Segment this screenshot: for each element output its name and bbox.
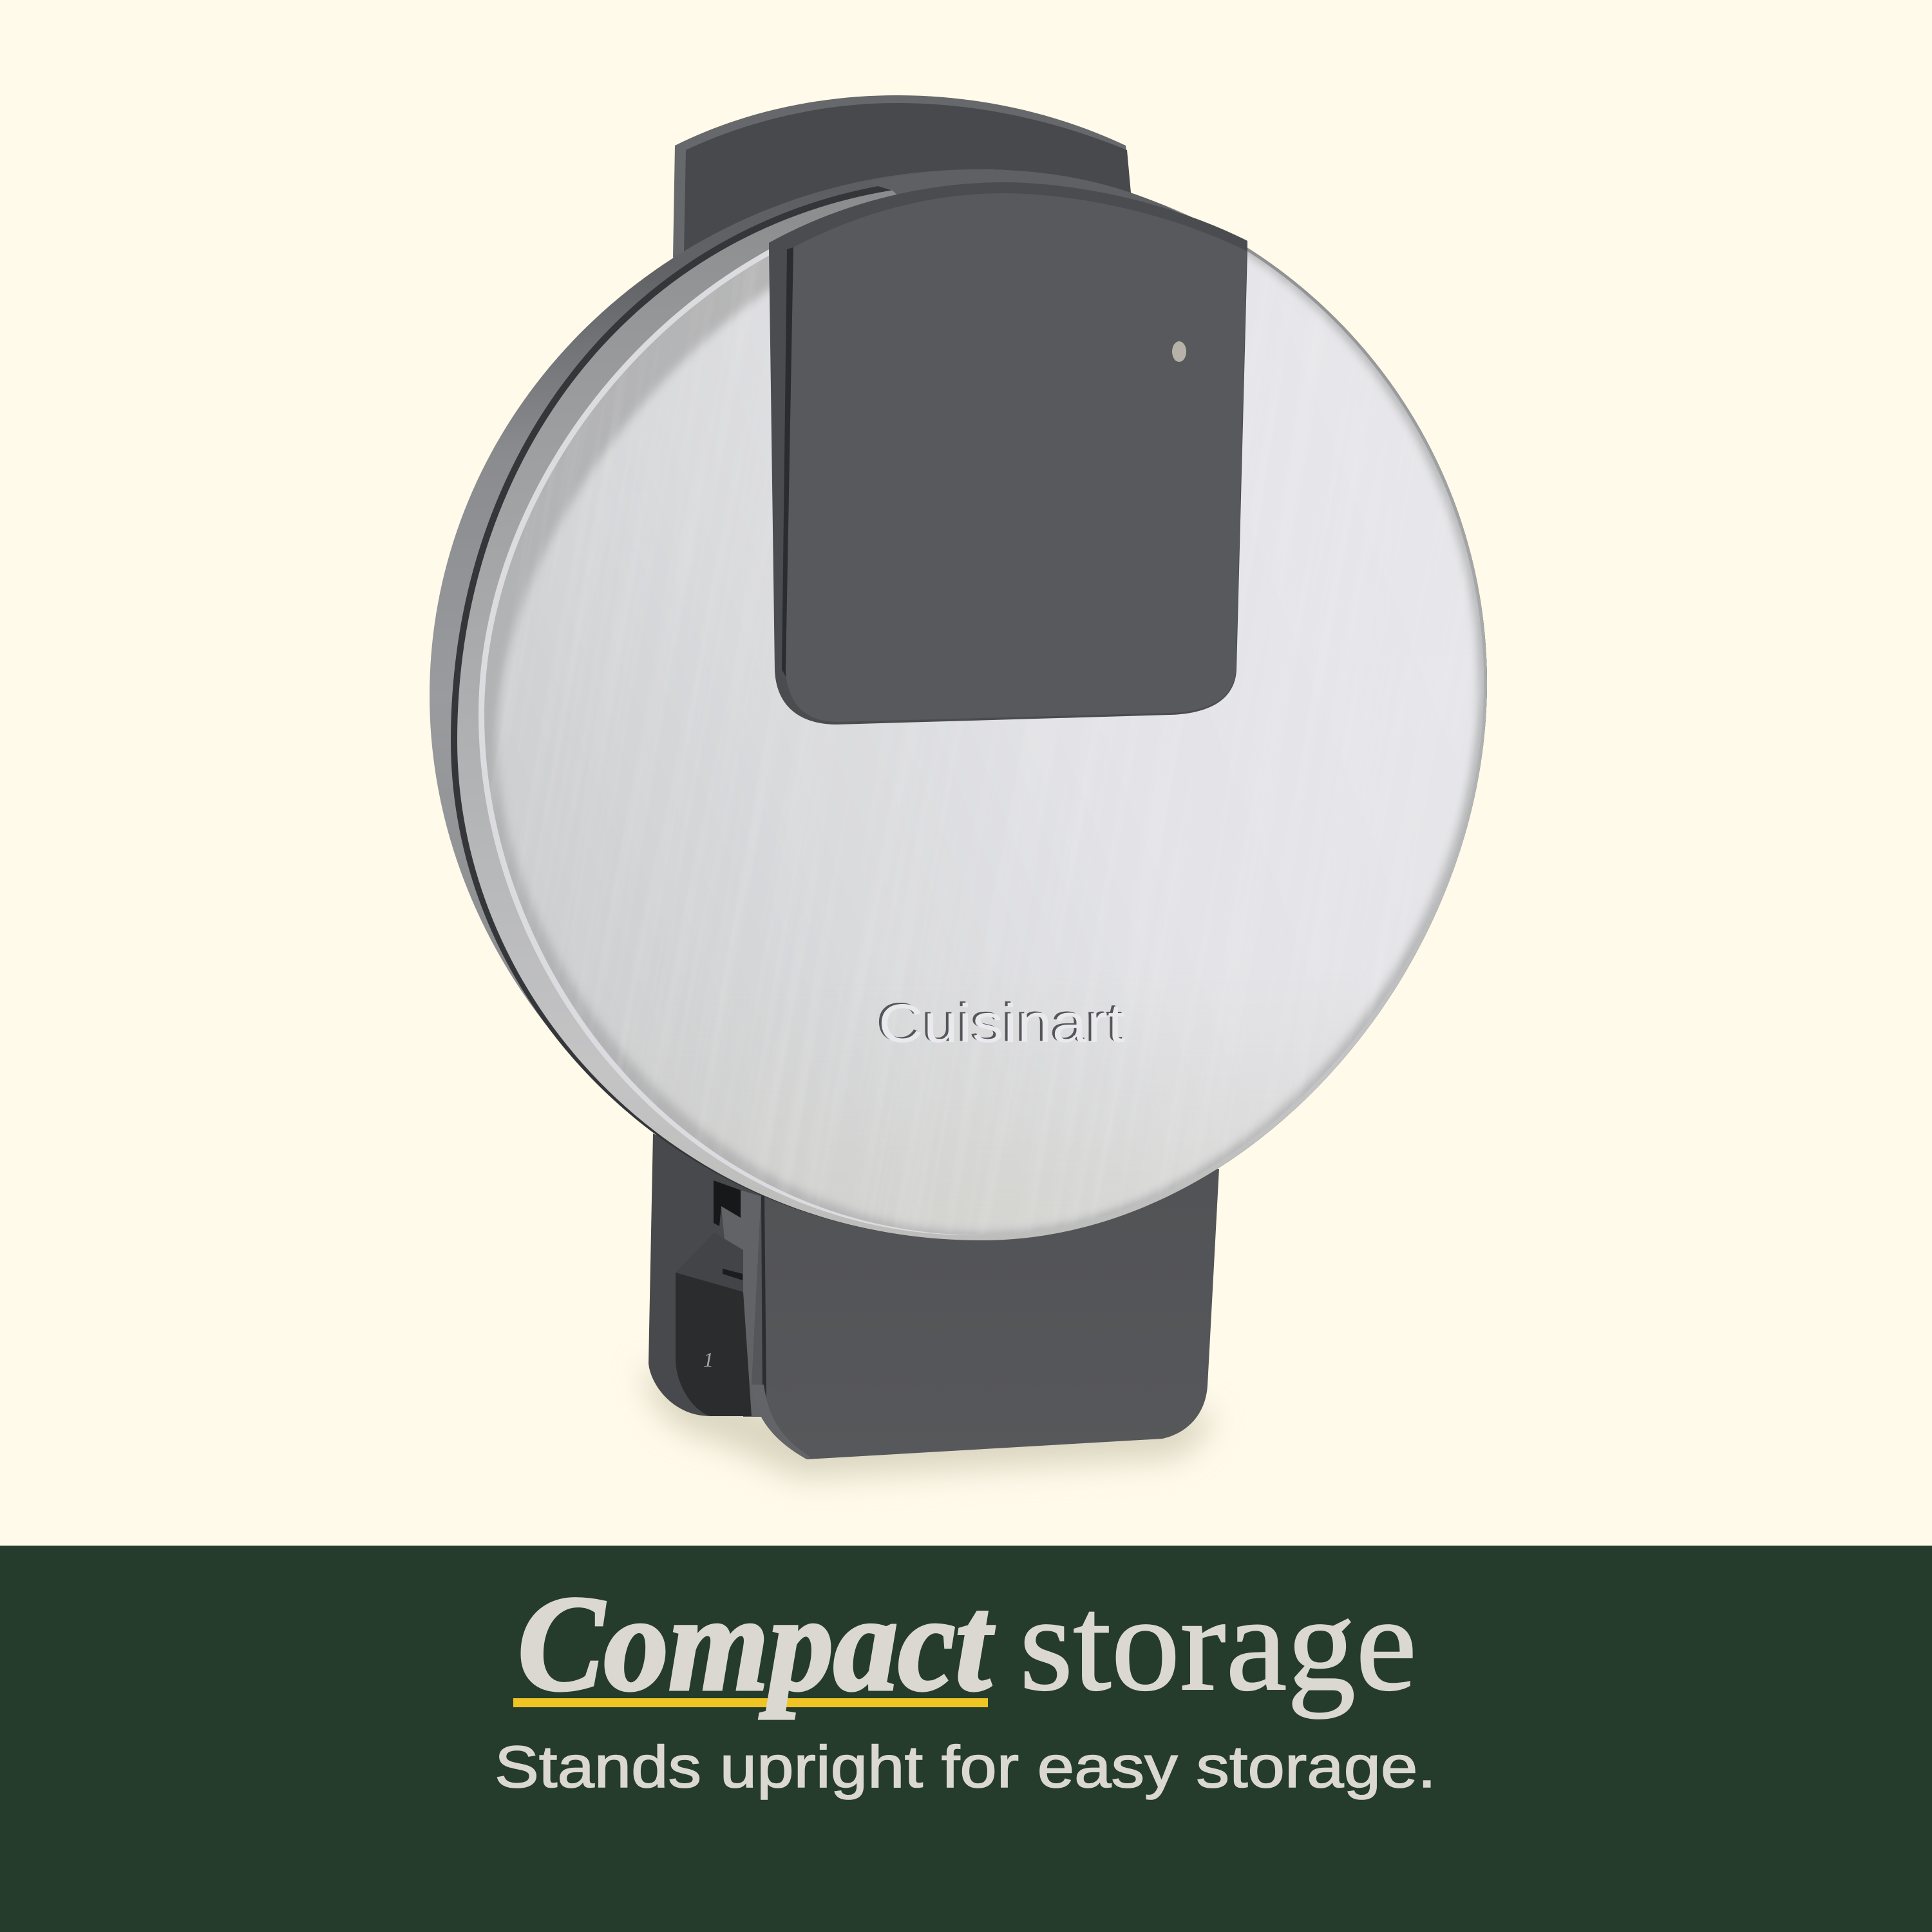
notch — [714, 1180, 741, 1226]
handle inner shadow line — [782, 247, 793, 683]
headline: Compact — [518, 1567, 995, 1719]
embossed logo: Cuisinart — [878, 993, 1125, 1054]
back foot — [649, 1133, 773, 1417]
headline — [518, 1567, 1417, 1719]
recess wedge — [676, 1233, 743, 1292]
caption panel — [0, 1546, 1932, 1932]
metal disc — [430, 169, 1487, 1240]
outer shell — [430, 169, 1487, 1240]
subheading: Stands upright for easy storage. — [495, 1734, 1436, 1800]
headline underline — [513, 1698, 988, 1707]
handle face — [786, 193, 1247, 722]
recess slit — [723, 1269, 743, 1280]
dark cord recess — [676, 1273, 752, 1416]
top latch band — [867, 169, 1247, 258]
foot bottom edge — [752, 1385, 810, 1459]
indicator light — [1172, 341, 1186, 362]
rim highlight — [478, 173, 1484, 1235]
hinge strip — [721, 1190, 766, 1417]
brushed face — [493, 251, 1484, 1235]
rim band — [457, 169, 1487, 1240]
embossed logo: Cuisinart — [876, 992, 1122, 1052]
background — [0, 0, 1932, 1546]
front foot — [752, 1169, 1219, 1459]
headline: storage — [1019, 1567, 1417, 1719]
product photo: upright waffle maker — [430, 95, 1487, 1489]
foot left edge line — [761, 1195, 766, 1397]
back handle — [673, 95, 1132, 258]
embossed number: 1 — [703, 1348, 714, 1371]
inner groove — [484, 173, 1484, 1235]
dark seam — [451, 169, 1487, 1240]
front handle — [769, 182, 1247, 724]
ground shadow — [644, 1365, 1211, 1478]
